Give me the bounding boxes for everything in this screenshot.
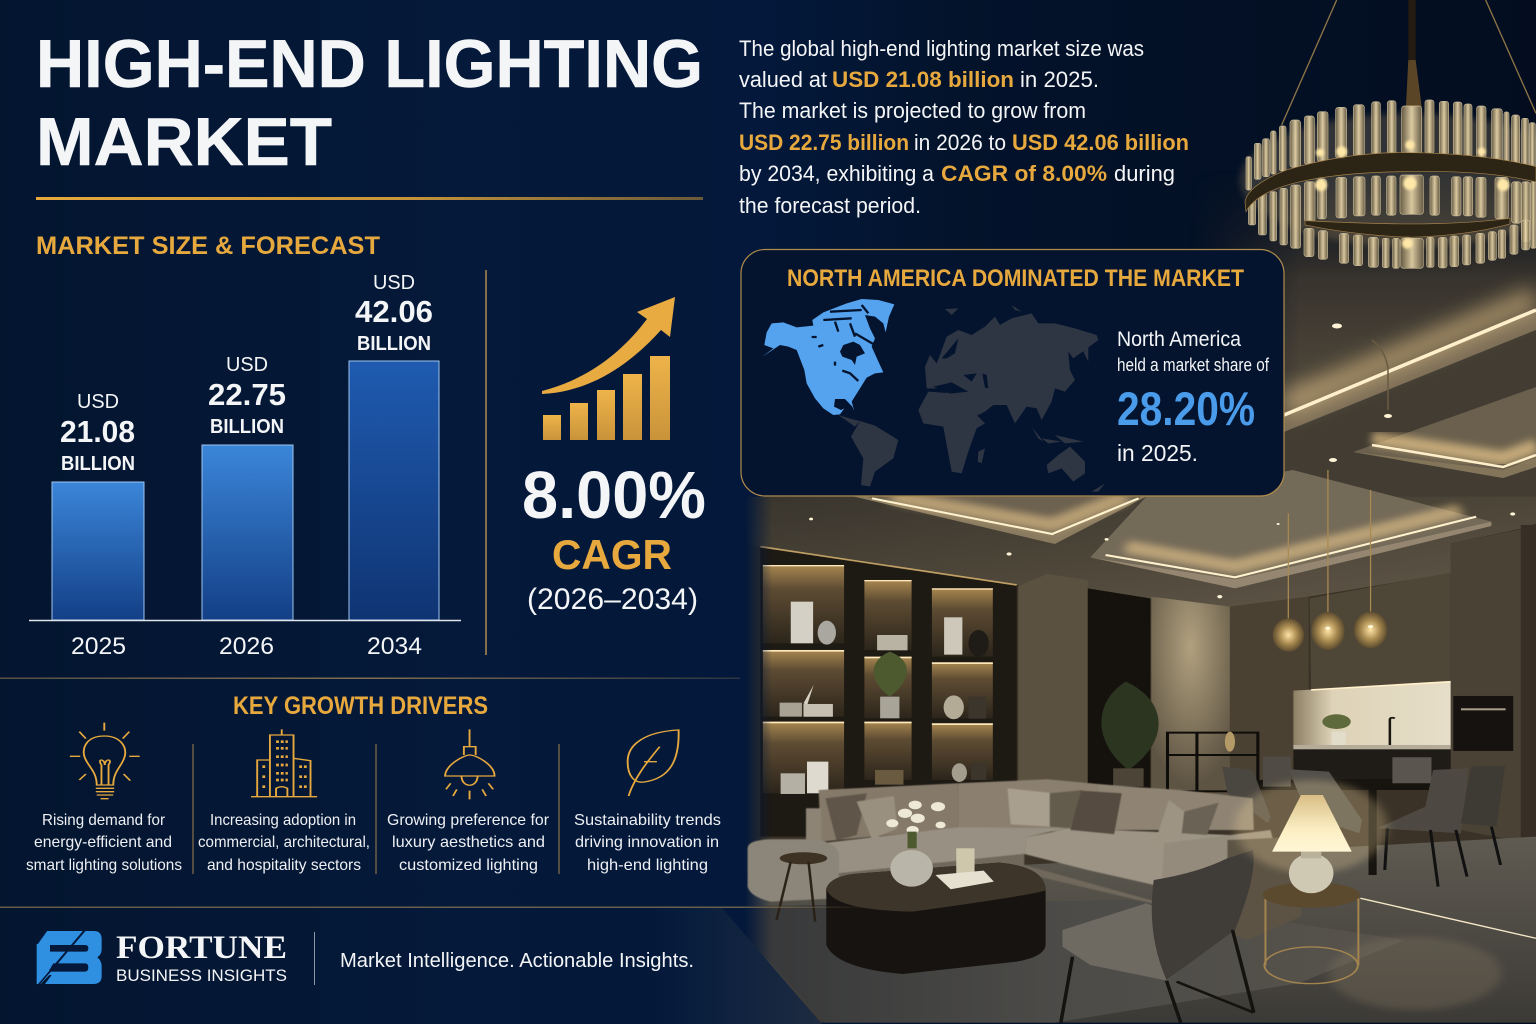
title: HIGH-END LIGHTING xyxy=(36,26,703,102)
market share text: North America xyxy=(1117,328,1241,351)
floor light strip xyxy=(1360,898,1536,938)
vase and flowers xyxy=(886,801,946,887)
kitchen tap and plant xyxy=(1322,714,1395,745)
bar 2034: BILLION xyxy=(357,333,431,355)
room interior xyxy=(689,470,1536,1023)
wall panel xyxy=(1151,597,1230,797)
ceiling upper right xyxy=(1218,197,1536,497)
world map xyxy=(762,299,1105,492)
pillows xyxy=(825,788,1219,850)
logo wordmark: BUSINESS INSIGHTS xyxy=(116,966,287,985)
tagline: Market Intelligence. Actionable Insights. xyxy=(340,950,694,972)
gold title rule xyxy=(36,197,703,200)
floor glow xyxy=(1329,937,1502,1010)
summary text: USD 22.75 billion xyxy=(739,130,909,155)
logo mark xyxy=(37,930,102,985)
market share text xyxy=(1117,328,1270,466)
icon: pendant lamp xyxy=(445,729,495,799)
bar 2034: 42.06 xyxy=(355,294,433,329)
lower crystals xyxy=(1304,220,1530,268)
plant xyxy=(1101,682,1159,787)
bar 2025: 2025 xyxy=(71,633,126,660)
ceiling xyxy=(710,497,1536,607)
title: MARKET xyxy=(36,104,332,180)
summary text: during xyxy=(1114,161,1175,186)
rug xyxy=(720,900,1405,1023)
driver: luxury aesthetics: luxury aesthetics and xyxy=(392,834,545,851)
market share text: 28.20% xyxy=(1117,382,1255,435)
candle and books xyxy=(935,848,994,889)
back wall xyxy=(710,520,1536,873)
panel: North America xyxy=(741,250,1284,496)
summary text: by 2034, exhibiting a xyxy=(739,161,935,186)
growth drivers xyxy=(26,723,721,874)
driver: commercial adoption xyxy=(198,729,370,874)
title xyxy=(36,26,703,180)
CAGR stat: CAGR xyxy=(552,531,672,578)
suspension rods xyxy=(1282,0,1536,125)
accent chair xyxy=(1061,850,1254,1023)
navy floor at left xyxy=(650,905,822,1024)
driver: luxury aesthetics xyxy=(387,729,550,874)
chandelier xyxy=(1240,0,1536,268)
market share text: held a market share of xyxy=(1117,355,1270,375)
floor xyxy=(689,837,1536,1023)
logo wordmark xyxy=(116,930,287,985)
panel heading: NORTH AMERICA DOMINATED THE MARKET xyxy=(787,265,1244,292)
glass door xyxy=(1088,588,1150,790)
summary text: in 2025. xyxy=(1020,67,1099,92)
driver: commercial adoption: commercial, architectural, xyxy=(198,834,370,851)
foreground furniture xyxy=(748,779,1387,1023)
summary text: the forecast period. xyxy=(739,193,921,218)
bar 2025 xyxy=(52,391,144,660)
sofa xyxy=(748,779,1301,940)
driver: energy-efficient xyxy=(26,723,182,874)
oven xyxy=(1453,696,1513,751)
driver: luxury aesthetics: Growing preference for xyxy=(387,812,550,829)
summary text: in 2026 to xyxy=(914,130,1006,155)
icon: leaf xyxy=(628,730,679,796)
bar stand xyxy=(1167,732,1258,791)
driver: sustainability xyxy=(574,730,721,874)
pendant lights xyxy=(1273,470,1387,652)
summary text: CAGR of 8.00% xyxy=(941,161,1107,186)
driver: sustainability: driving innovation in xyxy=(575,834,719,851)
bar 2026 xyxy=(202,354,293,660)
shelving unit xyxy=(760,547,1017,837)
CAGR stat: 8.00% xyxy=(522,458,706,533)
upper metal band xyxy=(1245,153,1536,212)
map: North America highlighted xyxy=(762,299,894,415)
bar 2034: 2034 xyxy=(367,633,422,660)
ottoman xyxy=(748,839,839,902)
left navy fade xyxy=(650,490,772,1024)
driver: commercial adoption: and hospitality sectors xyxy=(207,857,361,874)
summary text: USD 42.06 billion xyxy=(1012,130,1189,155)
CAGR stat xyxy=(522,458,706,616)
tall cabinets xyxy=(1451,529,1521,842)
summary text: valued at xyxy=(739,67,827,92)
ceiling coves xyxy=(809,470,1515,598)
driver: luxury aesthetics: customized lighting xyxy=(399,857,538,874)
dining set xyxy=(1222,757,1505,887)
summary text: USD 21.08 billion xyxy=(832,67,1014,92)
driver: sustainability: Sustainability trends xyxy=(574,812,721,829)
bar 2026: 22.75 xyxy=(208,377,286,412)
driver: energy-efficient: smart lighting solutions xyxy=(26,857,182,874)
CAGR stat: (2026–2034) xyxy=(527,583,698,616)
kitchen upper cabinets xyxy=(1310,573,1451,690)
icon: buildings xyxy=(251,729,317,797)
market share text: in 2025. xyxy=(1117,440,1198,466)
middle crystals xyxy=(1248,175,1536,248)
logo wordmark: FORTUNE xyxy=(116,930,287,966)
footer brand xyxy=(37,930,694,985)
icon: light bulb xyxy=(70,723,140,799)
bar 2025: USD xyxy=(77,391,119,413)
driver: energy-efficient: Rising demand for xyxy=(42,812,166,829)
bar 2025: 21.08 xyxy=(60,414,135,449)
summary text: The global high-end lighting market size was xyxy=(739,36,1144,61)
bar 2026: BILLION xyxy=(210,416,284,438)
backsplash xyxy=(1293,682,1451,747)
coffee table xyxy=(826,863,1046,974)
bar 2034: USD xyxy=(373,272,415,294)
bar 2034 xyxy=(349,272,439,660)
bar chart xyxy=(29,272,461,660)
side table lamp xyxy=(1235,780,1387,984)
small stool xyxy=(777,852,827,922)
driver: commercial adoption: Increasing adoption in xyxy=(210,812,356,829)
driver: sustainability: high-end lighting xyxy=(587,857,708,874)
summary text xyxy=(739,36,1189,218)
glowing bulbs xyxy=(1315,140,1509,249)
kitchen wall xyxy=(1230,597,1309,787)
shelf decor xyxy=(780,602,989,794)
icon: growth arrow and bars xyxy=(542,297,675,440)
summary text: The market is projected to grow from xyxy=(739,98,1086,123)
bar 2026: 2026 xyxy=(219,633,274,660)
bar 2026: USD xyxy=(226,354,268,376)
column xyxy=(1018,574,1088,783)
upper crystals xyxy=(1246,100,1535,190)
section heading: market size: MARKET SIZE & FORECAST xyxy=(36,232,380,260)
map: other continents xyxy=(838,305,1105,492)
map: inland seas xyxy=(933,338,988,394)
lower metal band xyxy=(1305,218,1510,237)
driver: energy-efficient: energy-efficient and xyxy=(34,834,172,851)
chandelier glow xyxy=(1240,113,1536,247)
bar 2025: BILLION xyxy=(61,453,135,475)
counter xyxy=(1293,745,1451,750)
section heading: key growth drivers: KEY GROWTH DRIVERS xyxy=(233,692,488,720)
